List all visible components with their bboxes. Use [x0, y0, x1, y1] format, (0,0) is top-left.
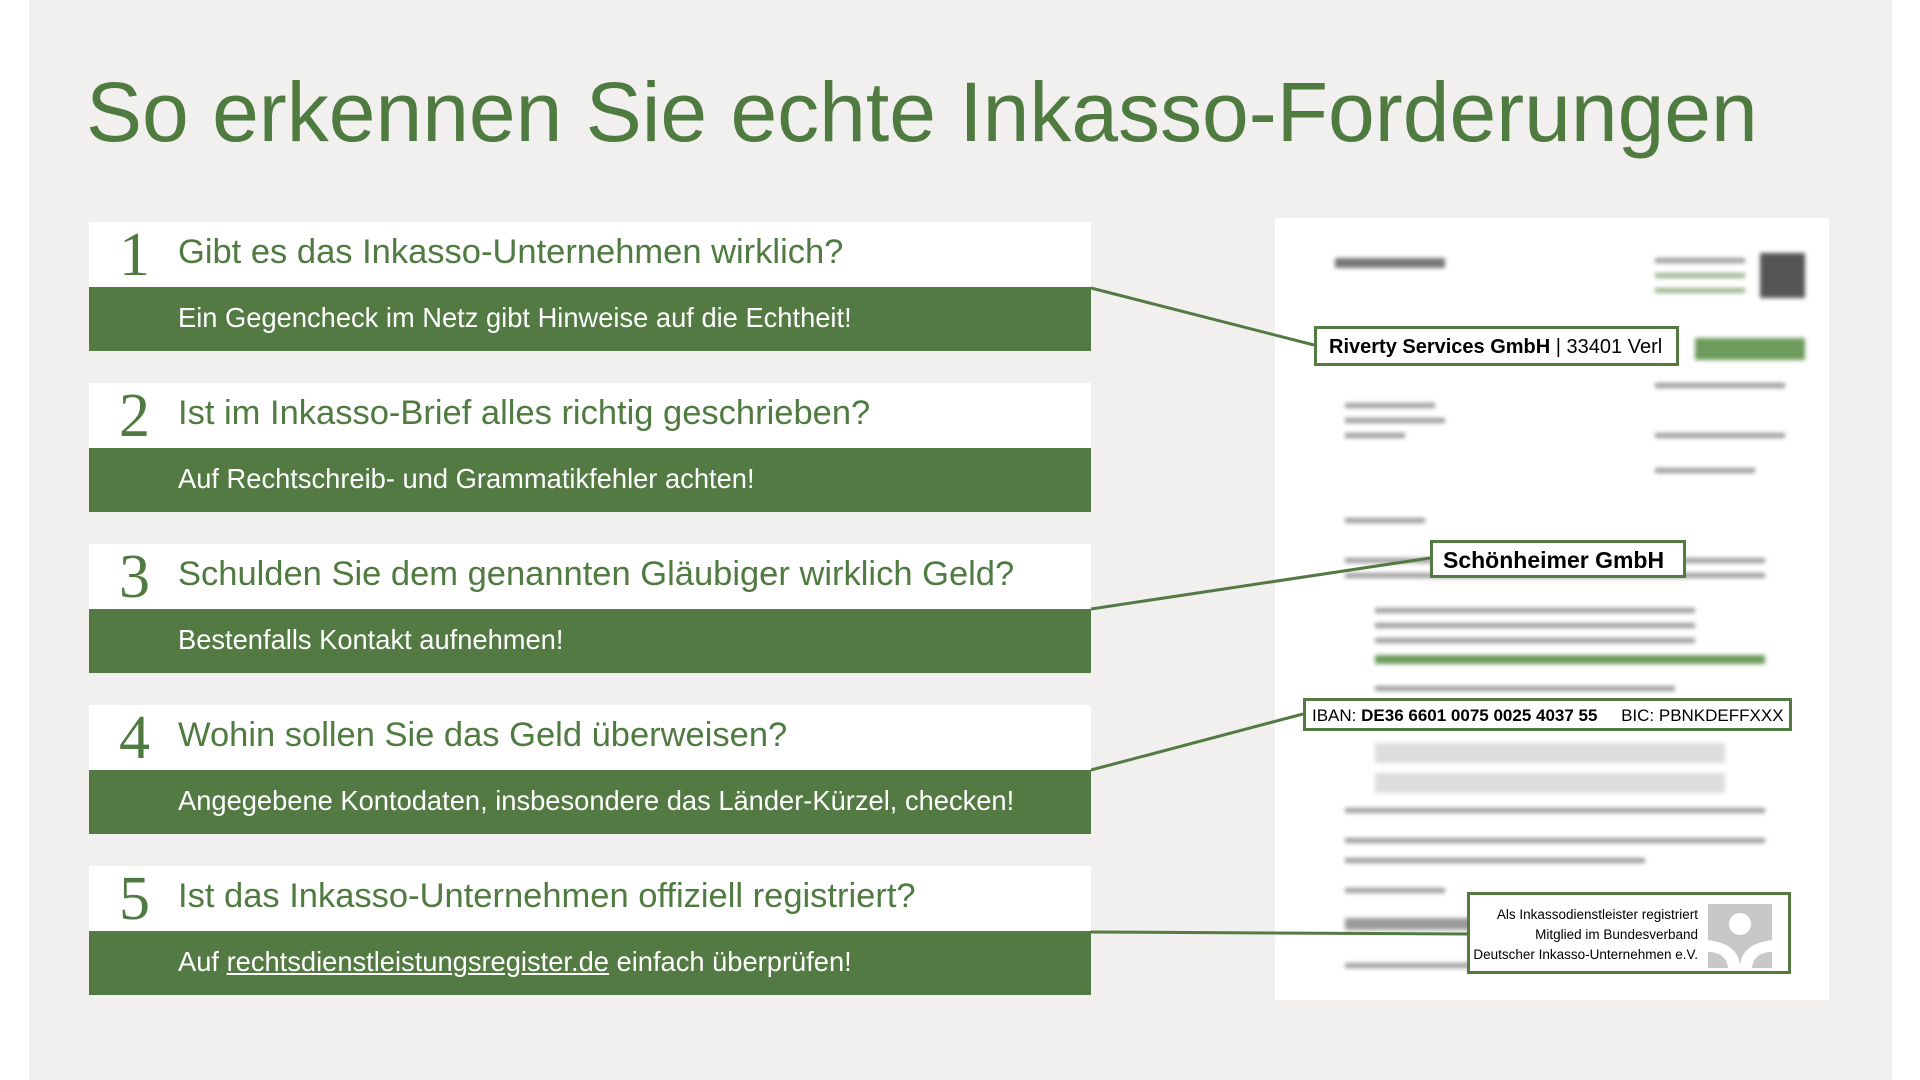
blurred letter document: [1275, 218, 1829, 1000]
callout: IBAN: [1303, 698, 1792, 731]
callout: register badge: [1467, 892, 1791, 974]
row 1: Gibt es das Inkasso-Unternehmen wirklich?: [178, 233, 843, 271]
row 2: Ist im Inkasso-Brief alles richtig geschrieben?: [178, 394, 870, 432]
callout: Riverty: Riverty Services GmbH | 33401 Verl: [1329, 336, 1662, 358]
row 2: Auf Rechtschreib- und Grammatikfehler achten!: [178, 463, 755, 494]
row 1: [89, 221, 1091, 351]
callout: register badge: Mitglied im Bundesverband: [1535, 927, 1698, 942]
callout: register badge: Als Inkassodienstleister registriert: [1497, 907, 1698, 922]
row 4: Angegebene Kontodaten, insbesondere das Länder-Kürzel, checken!: [178, 785, 1014, 816]
callout: Schönheimer: [1430, 540, 1686, 578]
row 2: 2: [119, 382, 150, 450]
row 4: 4: [119, 704, 150, 772]
callout: register badge: Deutscher Inkasso-Unternehmen e.V.: [1473, 947, 1698, 962]
callout: IBAN: IBAN: DE36 6601 0075 0025 4037 55 BIC: PBNKDEFFXXX: [1312, 706, 1784, 725]
row 1: 1: [119, 221, 150, 289]
callout: Schönheimer: Schönheimer GmbH: [1443, 547, 1664, 573]
row 4: [89, 704, 1091, 834]
icon: BDIU logo: [1708, 904, 1772, 968]
row 3: 3: [119, 543, 150, 611]
row 5: Auf rechtsdienstleistungsregister.de einfach überprüfen!: [178, 946, 852, 977]
row 2: [89, 382, 1091, 512]
row 3: Bestenfalls Kontakt aufnehmen!: [178, 624, 563, 655]
callout: Riverty: [1314, 326, 1679, 366]
title: So erkennen Sie echte Inkasso-Forderungen: [86, 65, 1758, 159]
row 4: Wohin sollen Sie das Geld überweisen?: [178, 716, 787, 754]
row 1: Ein Gegencheck im Netz gibt Hinweise auf die Echtheit!: [178, 302, 852, 333]
row 3: Schulden Sie dem genannten Gläubiger wirklich Geld?: [178, 555, 1014, 593]
row 5: [89, 865, 1091, 995]
row 5: 5: [119, 865, 150, 933]
row 5: Ist das Inkasso-Unternehmen offiziell registriert?: [178, 877, 916, 915]
row 3: [89, 543, 1091, 673]
